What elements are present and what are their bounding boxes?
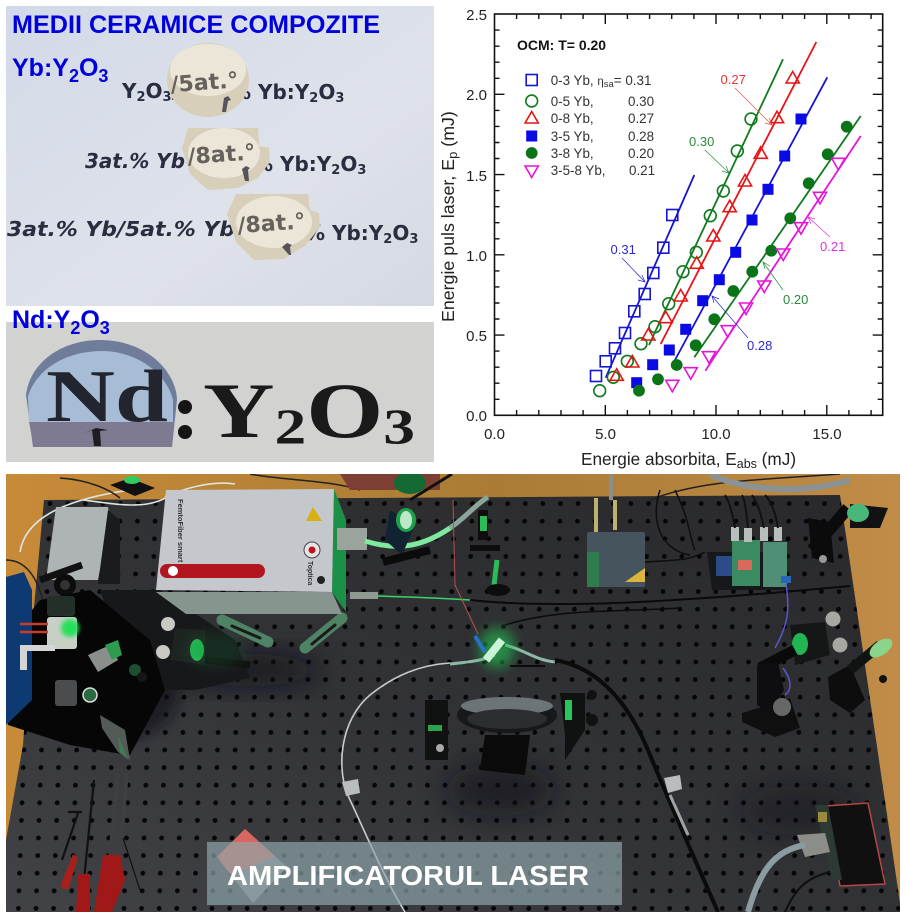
sample label row 3 bbox=[7, 217, 418, 247]
series: 3-5 Yb filled squares bbox=[631, 114, 806, 388]
chart: laser pulse energy vs absorbed energy bbox=[438, 7, 883, 471]
callout: 0.30 bbox=[689, 134, 729, 173]
legend: 0-8 Yb, bbox=[551, 111, 594, 126]
legend: 0.27 bbox=[628, 111, 654, 126]
legend: = 0.31 bbox=[614, 73, 651, 88]
ceramic disc 2: /8at.° bbox=[187, 140, 256, 170]
legend: 0-5 Yb, bbox=[551, 94, 594, 109]
legend: 3-5 Yb, bbox=[551, 129, 594, 144]
sample label row 1 bbox=[121, 79, 344, 106]
panel: Nd:Y2O3 sample photo bbox=[6, 322, 434, 462]
callout: 0.31 bbox=[610, 242, 645, 282]
text: Y2O3: Y bbox=[203, 367, 259, 454]
upper green mirrors bbox=[110, 472, 510, 596]
callout: 0.20: 0.20 bbox=[783, 292, 808, 307]
y axis numbers: 1.5 bbox=[466, 168, 487, 185]
fit lines bbox=[606, 42, 861, 378]
callout: 0.28 bbox=[712, 296, 772, 353]
callout: 0.30: 0.30 bbox=[689, 134, 714, 149]
text: colon bbox=[178, 400, 192, 439]
legend bbox=[525, 73, 655, 178]
series: 0-5 Yb open circles bbox=[594, 113, 757, 397]
ceramic disc 1 bbox=[167, 43, 249, 117]
sample label row 1: % Yb:Y bbox=[231, 80, 309, 104]
sample label row 3: % Yb:Y bbox=[305, 221, 383, 245]
card under caption bbox=[217, 829, 287, 903]
legend: 0.21 bbox=[629, 163, 655, 178]
series: 0-3 Yb open squares bbox=[590, 210, 678, 382]
y axis numbers: 0.0 bbox=[466, 408, 487, 425]
Nd ceramic disc bbox=[26, 340, 177, 447]
middle green mirror mount bbox=[156, 617, 250, 668]
x axis title: abs bbox=[737, 457, 757, 471]
lens and glowing tube bbox=[20, 596, 147, 706]
ceramic disc 3: /8at.° bbox=[237, 209, 306, 239]
sample label row 2: 3at.% Yb bbox=[85, 149, 185, 173]
heading: Yb:Y2O3: Yb:Y bbox=[12, 54, 69, 82]
ceramic disc 1: /5at.° bbox=[170, 68, 239, 98]
y axis title: (mJ) bbox=[438, 111, 458, 152]
black mounts cluster bbox=[8, 565, 250, 760]
callout: 0.21 bbox=[808, 217, 845, 254]
sample label row 2: 2 bbox=[331, 163, 340, 178]
sample label row 2 bbox=[85, 149, 366, 178]
sample label row 1: O bbox=[146, 79, 163, 103]
laser box: Toptica bbox=[306, 561, 313, 585]
panel: Yb:Y2O3 ceramic samples photo bbox=[6, 6, 434, 306]
x axis title: (mJ) bbox=[757, 449, 796, 469]
right top mirror on post bbox=[808, 504, 888, 563]
y axis numbers bbox=[466, 7, 487, 425]
legend: 0-3 Yb, η bbox=[551, 73, 604, 88]
caption: AMPLIFICATORUL LASER: AMPLIFICATORUL LASER bbox=[227, 860, 589, 891]
text: Y2O3: 2 bbox=[275, 398, 306, 454]
y axis numbers: 2.0 bbox=[466, 87, 487, 104]
sample label row 1: O bbox=[318, 80, 335, 104]
callout: 0.27: 0.27 bbox=[720, 72, 746, 87]
y axis title: Energie puls laser, E bbox=[438, 159, 458, 322]
x axis numbers: 15.0 bbox=[812, 426, 842, 443]
laser box: FemtoFiber smart bbox=[176, 499, 185, 563]
left grey controller box bbox=[46, 507, 120, 584]
heading: Nd:Y2O3: 2 bbox=[70, 318, 80, 338]
chart frame and ticks bbox=[494, 14, 883, 415]
y axis title: p bbox=[445, 152, 460, 159]
heading: Yb:Y2O3: O bbox=[79, 54, 98, 82]
cable clips bbox=[342, 775, 688, 835]
blue enclosure bbox=[6, 572, 32, 725]
far right mount bbox=[828, 635, 896, 713]
legend: sa bbox=[604, 79, 615, 90]
sample label row 1: / bbox=[172, 79, 180, 103]
sample label row 1: 3 bbox=[335, 91, 344, 106]
sample label row 1: 3 bbox=[163, 90, 172, 105]
heading: Nd:Y2O3: 3 bbox=[100, 318, 110, 338]
small driver board bbox=[587, 474, 705, 587]
x axis numbers: 10.0 bbox=[701, 426, 731, 443]
top cables bbox=[6, 474, 850, 610]
callout: 0.31: 0.31 bbox=[610, 242, 636, 257]
screwdrivers bbox=[60, 773, 140, 912]
sample label row 2: O bbox=[340, 152, 357, 176]
x axis numbers: 5.0 bbox=[595, 426, 616, 443]
x axis numbers: 0.0 bbox=[484, 426, 505, 443]
y axis numbers: 0.5 bbox=[466, 328, 487, 345]
bench shadows bbox=[60, 640, 860, 835]
bottom right black box with connector bbox=[748, 803, 885, 912]
legend: 0.20 bbox=[628, 146, 654, 161]
optical breadboard bbox=[6, 495, 900, 912]
series: 3-5-8 Yb inverted triangles bbox=[666, 158, 845, 392]
legend: 0.28 bbox=[628, 129, 654, 144]
bracket feet bbox=[222, 618, 342, 648]
right green-glow mount bbox=[742, 612, 848, 737]
green glow and delivery cable bbox=[337, 497, 850, 634]
green fibre combiner bbox=[342, 628, 718, 912]
legend: 0.30 bbox=[628, 94, 654, 109]
sample label row 2: % Yb:Y bbox=[253, 152, 331, 176]
text: Y2O3: O bbox=[306, 367, 383, 454]
ceramic disc 3 bbox=[227, 194, 320, 260]
panel: laser amplifier bench photo bbox=[6, 472, 900, 912]
laser box bbox=[156, 489, 346, 614]
series: 3-8 Yb filled circles bbox=[633, 121, 853, 397]
heading: Nd:Y2O3: O bbox=[80, 306, 100, 334]
ceramic disc 2 bbox=[182, 128, 270, 190]
y axis numbers: 1.0 bbox=[466, 248, 487, 265]
legend: 3-5-8 Yb, bbox=[551, 163, 606, 178]
sample label row 2: 3 bbox=[357, 163, 366, 178]
x axis title: Energie absorbita, E bbox=[581, 449, 737, 469]
rotary stage bbox=[425, 690, 598, 775]
sample label row 1: 2 bbox=[136, 90, 146, 105]
sample label row 3: O bbox=[392, 221, 409, 245]
electronics stack bbox=[707, 495, 791, 695]
callout: 0.20 bbox=[763, 262, 808, 307]
heading: Nd:Y2O3: Nd:Y bbox=[12, 306, 70, 334]
text: Y2O3: 3 bbox=[383, 398, 415, 454]
sample label row 3: 3 bbox=[409, 232, 418, 247]
caption box bbox=[207, 842, 622, 905]
sample label row 1: Y bbox=[122, 79, 136, 103]
callout: 0.27 bbox=[720, 72, 772, 125]
heading: Yb:Y2O3: 2 bbox=[69, 66, 79, 86]
x axis numbers bbox=[484, 426, 842, 443]
text: Nd: Nd bbox=[46, 356, 168, 438]
sample label row 1: 2 bbox=[309, 91, 318, 106]
heading: MEDII CERAMICE COMPOZITE: MEDII CERAMICE COMPOZITE bbox=[12, 11, 380, 39]
heading: Yb:Y2O3: 3 bbox=[98, 66, 108, 86]
legend: 3-8 Yb, bbox=[551, 146, 594, 161]
annotation text: OCM: OCM: T= 0.20 bbox=[517, 37, 606, 53]
series: 0-8 Yb open triangles bbox=[610, 72, 799, 380]
y axis numbers: 2.5 bbox=[466, 7, 487, 24]
sample label row 3: 3at.% Yb/5at.% Yb bbox=[7, 217, 235, 241]
callout: 0.21: 0.21 bbox=[820, 239, 845, 254]
sample label row 3: 2 bbox=[383, 232, 392, 247]
callout: 0.28: 0.28 bbox=[747, 338, 772, 353]
